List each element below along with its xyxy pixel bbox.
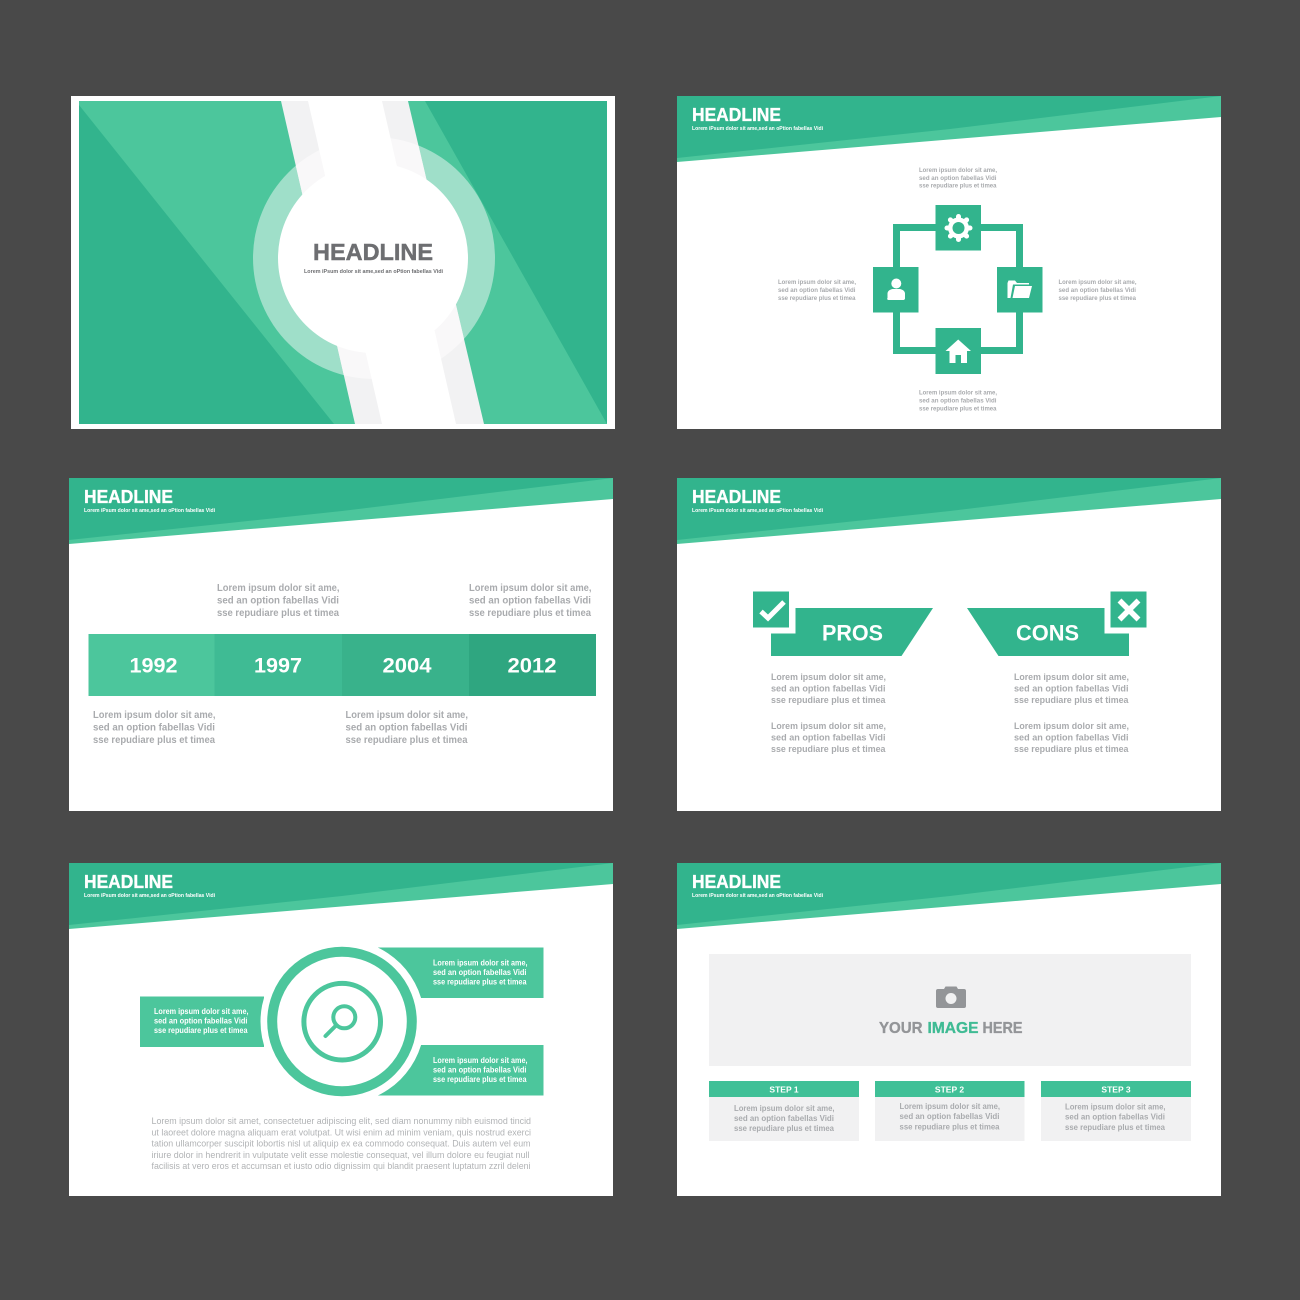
caption top: sse repudiare plus et timea: [919, 182, 997, 190]
caption 2012: Lorem ipsum dolor sit ame,: [469, 582, 592, 594]
headline: HEADLINE: [692, 105, 781, 125]
caption 2004: sse repudiare plus et timea: [346, 734, 468, 746]
caption bottom: Lorem ipsum dolor sit ame,: [919, 390, 997, 396]
header dark wedge: [69, 863, 613, 925]
step 3 card: STEP 3: [1101, 1084, 1131, 1094]
icon: magnifier: [326, 1006, 355, 1036]
cover green field: [79, 101, 607, 424]
step 1 card: sed an option fabellas Vidi: [734, 1114, 834, 1123]
panel: timeline slide: [69, 478, 613, 811]
caption 2012: sse repudiare plus et timea: [469, 607, 591, 619]
step 2 card: sed an option fabellas Vidi: [900, 1112, 1000, 1121]
node: gear: [936, 205, 981, 250]
headline: HEADLINE: [692, 487, 781, 507]
slide background: [677, 863, 1221, 1196]
placeholder label: [879, 1020, 1023, 1037]
subtitle: Lorem iPsum dolor sit ame,sed an oPtion fabellas Vidi: [84, 508, 216, 514]
outer ring: [272, 952, 412, 1091]
icon: check box: [753, 592, 789, 628]
step 1 card: Lorem ipsum dolor sit ame,: [734, 1104, 834, 1113]
caption 1997: Lorem ipsum dolor sit ame,: [217, 582, 340, 594]
callout box top right: [378, 948, 544, 998]
step 3 card: sse repudiare plus et timea: [1065, 1123, 1166, 1132]
caption bottom: sed an option fabellas Vidi: [919, 398, 997, 404]
body paragraph: tation ullamcorper suscipit lobortis nisl ut aliquip ex ea commodo consequat. Duis autem vel eum: [152, 1138, 531, 1150]
pros text two: Lorem ipsum dolor sit ame,: [771, 721, 886, 732]
timeline bar: [88, 634, 596, 696]
step 3 card: sed an option fabellas Vidi: [1065, 1112, 1165, 1122]
panel: magnifier diagram slide: [69, 863, 613, 1196]
callout text left: sse repudiare plus et timea: [154, 1026, 248, 1035]
callout text top right: [433, 958, 528, 986]
cons text one: Lorem ipsum dolor sit ame,: [1014, 672, 1129, 683]
image placeholder: [709, 954, 1191, 1066]
pros ribbon: PROS: [822, 620, 883, 646]
header light wedge: [677, 96, 1221, 162]
cons text two: [1014, 721, 1129, 755]
header light wedge: [677, 478, 1221, 544]
header dark wedge: [677, 96, 1221, 158]
step 2 card: STEP 2: [935, 1084, 964, 1094]
body paragraph: facilisis at vero eros et accumsan et iusto odio dignissim qui blandit praesent luptatum zzril deleni: [152, 1161, 530, 1172]
cover frame: [71, 96, 615, 429]
timeline bar: 2004: [382, 654, 432, 678]
pros text two: [771, 721, 886, 755]
callout text left: sed an option fabellas Vidi: [154, 1016, 248, 1026]
timeline bar: 1992: [130, 654, 178, 678]
inner ring: [304, 983, 381, 1060]
caption 2004: [346, 709, 468, 746]
cons ribbon: CONS: [1016, 620, 1079, 646]
panel: image placeholder slide: [677, 863, 1221, 1196]
cons text two: sed an option fabellas Vidi: [1014, 732, 1128, 744]
body paragraph: ut laoreet dolore magna aliquam erat volutpat. Ut wisi enim ad minim veniam, quis nostrud exerci: [152, 1128, 531, 1138]
panel: process cycle slide: [677, 96, 1221, 429]
callout text bottom right: Lorem ipsum dolor sit ame,: [433, 1056, 528, 1065]
body paragraph: Lorem ipsum dolor sit amet, consectetuer adipiscing elit, sed diam nonummy nibh euismod tincid: [152, 1116, 531, 1127]
step 1 card: [709, 1081, 859, 1141]
caption 1997: [217, 582, 340, 619]
white circle cut-out: [260, 940, 424, 1104]
caption 2012: sed an option fabellas Vidi: [469, 594, 591, 606]
callout text bottom right: sed an option fabellas Vidi: [433, 1066, 526, 1074]
callout text top right: sed an option fabellas Vidi: [433, 968, 526, 977]
grey diagonal band: [281, 101, 484, 424]
cons text two: sse repudiare plus et timea: [1014, 744, 1129, 755]
header light wedge: [677, 863, 1221, 929]
step 2 card: Lorem ipsum dolor sit ame,: [900, 1102, 1000, 1111]
icon: camera: [936, 986, 966, 1008]
step 1 card: STEP 1: [769, 1084, 799, 1094]
caption 1992: sse repudiare plus et timea: [93, 734, 215, 746]
slide background: [677, 478, 1221, 811]
caption 1997: sse repudiare plus et timea: [217, 607, 339, 619]
lighter band inside ring: [296, 146, 464, 375]
pros text one: Lorem ipsum dolor sit ame,: [771, 672, 886, 683]
pros text one: [771, 672, 886, 706]
pros text two: sed an option fabellas Vidi: [771, 732, 886, 744]
step 3 card: Lorem ipsum dolor sit ame,: [1065, 1102, 1166, 1112]
caption left: [778, 279, 856, 302]
body paragraph: [152, 1116, 531, 1172]
node: folder: [997, 267, 1042, 312]
callout text top right: sse repudiare plus et timea: [433, 978, 527, 986]
caption 2004: sed an option fabellas Vidi: [346, 722, 468, 734]
white diagonal band: [308, 101, 456, 424]
caption 2012: [469, 582, 592, 619]
cons text one: sed an option fabellas Vidi: [1014, 684, 1128, 694]
header dark wedge: [69, 478, 613, 540]
caption 1992: sed an option fabellas Vidi: [93, 722, 215, 734]
step 2 card: sse repudiare plus et timea: [900, 1122, 1000, 1132]
placeholder label: YOUR: [879, 1020, 923, 1037]
caption top: [919, 167, 997, 190]
cover headline: HEADLINE: [313, 239, 433, 265]
slide background: [69, 863, 613, 1196]
caption 2004: Lorem ipsum dolor sit ame,: [346, 709, 468, 721]
caption left: sse repudiare plus et timea: [778, 295, 856, 302]
connector frame: [896, 228, 1020, 350]
translucent ring: [253, 137, 495, 379]
placeholder label: HERE: [982, 1020, 1023, 1037]
caption right: sed an option fabellas Vidi: [1058, 287, 1136, 294]
caption top: sed an option fabellas Vidi: [919, 175, 997, 182]
caption top: Lorem ipsum dolor sit ame,: [919, 167, 997, 174]
pros text one: sse repudiare plus et timea: [771, 695, 886, 706]
body paragraph: iriure dolor in hendrerit in vulputate velit esse molestie consequat, vel illum dolore eu feugiat null: [152, 1150, 530, 1161]
caption bottom: sse repudiare plus et timea: [919, 406, 997, 412]
placeholder label: IMAGE: [928, 1020, 979, 1037]
callout text top right: Lorem ipsum dolor sit ame,: [433, 958, 528, 968]
slide background: [677, 96, 1221, 429]
step 3 card: [1041, 1081, 1191, 1141]
panel: cover slide: [71, 96, 615, 429]
pros text two: sse repudiare plus et timea: [771, 744, 886, 755]
node: person: [873, 267, 918, 312]
cons text two: Lorem ipsum dolor sit ame,: [1014, 721, 1129, 732]
caption 1997: sed an option fabellas Vidi: [217, 594, 339, 606]
callout text bottom right: sse repudiare plus et timea: [433, 1075, 527, 1084]
subtitle: Lorem iPsum dolor sit ame,sed an oPtion fabellas Vidi: [84, 893, 216, 899]
headline: HEADLINE: [84, 872, 173, 892]
header dark wedge: [677, 863, 1221, 925]
callout text left: Lorem ipsum dolor sit ame,: [154, 1007, 248, 1016]
dark lower-left wedge: [79, 105, 334, 424]
timeline bar: 1997: [254, 654, 302, 678]
subtitle: Lorem iPsum dolor sit ame,sed an oPtion fabellas Vidi: [692, 126, 824, 132]
icon: cross box: [1110, 592, 1146, 628]
node: home: [936, 328, 981, 374]
cons text one: [1014, 672, 1129, 706]
caption bottom: [919, 390, 997, 412]
caption right: [1058, 279, 1137, 302]
caption left: sed an option fabellas Vidi: [778, 287, 856, 294]
pros ribbon: [771, 608, 933, 656]
dark upper-right wedge: [425, 101, 607, 424]
caption 1992: [93, 709, 216, 746]
caption left: Lorem ipsum dolor sit ame,: [778, 279, 856, 286]
cons ribbon: [967, 608, 1129, 656]
caption right: sse repudiare plus et timea: [1058, 295, 1136, 302]
caption right: Lorem ipsum dolor sit ame,: [1058, 279, 1137, 286]
panel: pros and cons slide: [677, 478, 1221, 811]
timeline bar: 2012: [508, 654, 556, 678]
callout box bottom right: [378, 1045, 544, 1096]
header light wedge: [69, 478, 613, 544]
cover subtitle: Lorem iPsum dolor sit ame,sed an oPtion fabellas Vidi: [304, 269, 443, 275]
callout text left: [154, 1007, 248, 1035]
step 2 card: [875, 1081, 1024, 1141]
headline: HEADLINE: [84, 487, 173, 507]
cons text one: sse repudiare plus et timea: [1014, 695, 1129, 706]
subtitle: Lorem iPsum dolor sit ame,sed an oPtion fabellas Vidi: [692, 508, 824, 514]
header light wedge: [69, 863, 613, 929]
header dark wedge: [677, 478, 1221, 540]
caption 1992: Lorem ipsum dolor sit ame,: [93, 709, 216, 721]
callout box left: [140, 996, 264, 1047]
white centre circle: [278, 163, 468, 353]
callout text bottom right: [433, 1056, 528, 1084]
slide background: [69, 478, 613, 811]
pros text one: sed an option fabellas Vidi: [771, 684, 886, 694]
subtitle: Lorem iPsum dolor sit ame,sed an oPtion fabellas Vidi: [692, 893, 824, 899]
step 1 card: sse repudiare plus et timea: [734, 1124, 835, 1133]
headline: HEADLINE: [692, 872, 781, 892]
